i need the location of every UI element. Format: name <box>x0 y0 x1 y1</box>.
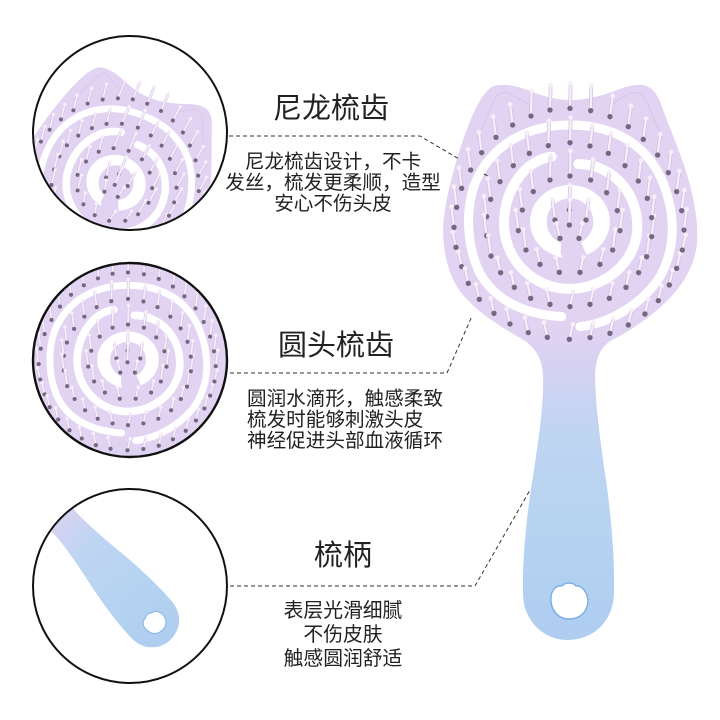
text block: handle description: 不伤皮肤 <box>303 624 383 646</box>
main product: hair brush <box>443 81 697 640</box>
text block: round tips description: 神经促进头部血液循环 <box>247 430 443 452</box>
callout line: nylon bristles <box>229 136 490 177</box>
text block: nylon bristles description: 尼龙梳齿设计，不卡 <box>245 151 421 173</box>
heading: handle: 梳柄 <box>314 539 372 572</box>
text block: handle description: 表层光滑细腻 <box>284 600 403 622</box>
heading: round tips: 圆头梳齿 <box>278 329 394 362</box>
inset circle: nylon bristles close-up <box>32 35 228 231</box>
callout line: round tips <box>230 316 472 373</box>
inset circle: round tip bristles close-up <box>32 262 228 458</box>
text block: nylon bristles description: 发丝，梳发更柔顺，造型 <box>225 172 441 194</box>
heading: nylon bristles: 尼龙梳齿 <box>273 92 389 125</box>
inset circle: handle close-up <box>32 488 228 684</box>
callout line: handle <box>230 490 530 586</box>
text block: handle description: 触感圆润舒适 <box>284 648 402 670</box>
text block: round tips description: 圆润水滴形，触感柔致 <box>247 388 443 410</box>
text block: round tips description: 梳发时能够刺激头皮 <box>247 409 423 431</box>
text block: nylon bristles description: 安心不伤头皮 <box>274 193 392 215</box>
